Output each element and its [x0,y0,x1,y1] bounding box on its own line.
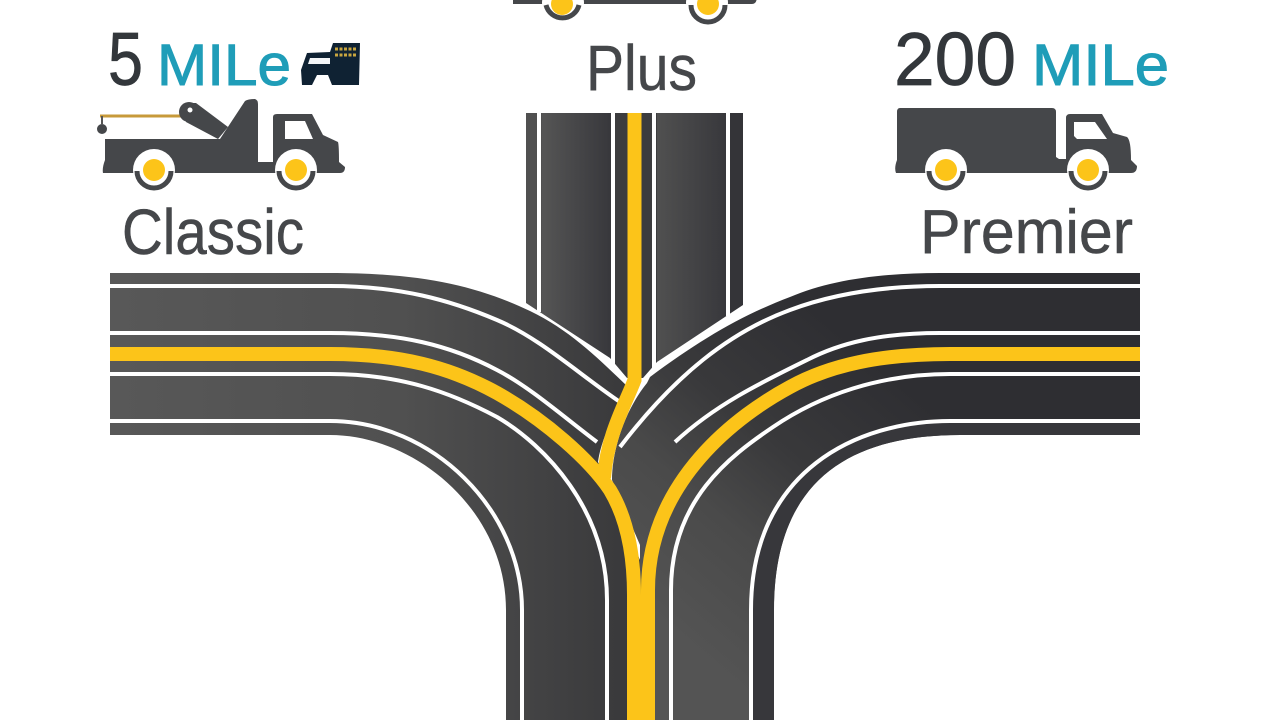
icon: truck cropped at top edge [513,0,757,24]
label: Classic: Classic [122,196,304,268]
tier: Premier [894,17,1169,267]
road junction [110,113,1140,720]
central road: Plus [526,113,743,393]
right road lane lines [620,286,1140,720]
right road outer lane [751,421,1140,720]
distance: 200 mile: MILe [1032,33,1169,98]
label: Premier: Premier [920,198,1133,267]
tier: Plus [513,0,757,104]
label: Plus: Plus [586,32,697,104]
distance: 5 mile: 5 [108,17,143,101]
distance: 5 mile [108,17,291,101]
tier: Classic [97,17,360,268]
icon: small truck [301,43,360,85]
central road lane lines [539,113,728,368]
yellow centre lines [110,113,1140,720]
left road: Classic [110,273,640,720]
distance: 5 mile: MILe [157,33,291,98]
left road lane lines [110,286,620,720]
icon: box truck [895,108,1137,191]
right road: Premier [612,273,1140,720]
distance: 200 mile [894,17,1169,101]
icon: tow truck [97,99,345,191]
distance: 200 mile: 200 [894,17,1016,101]
